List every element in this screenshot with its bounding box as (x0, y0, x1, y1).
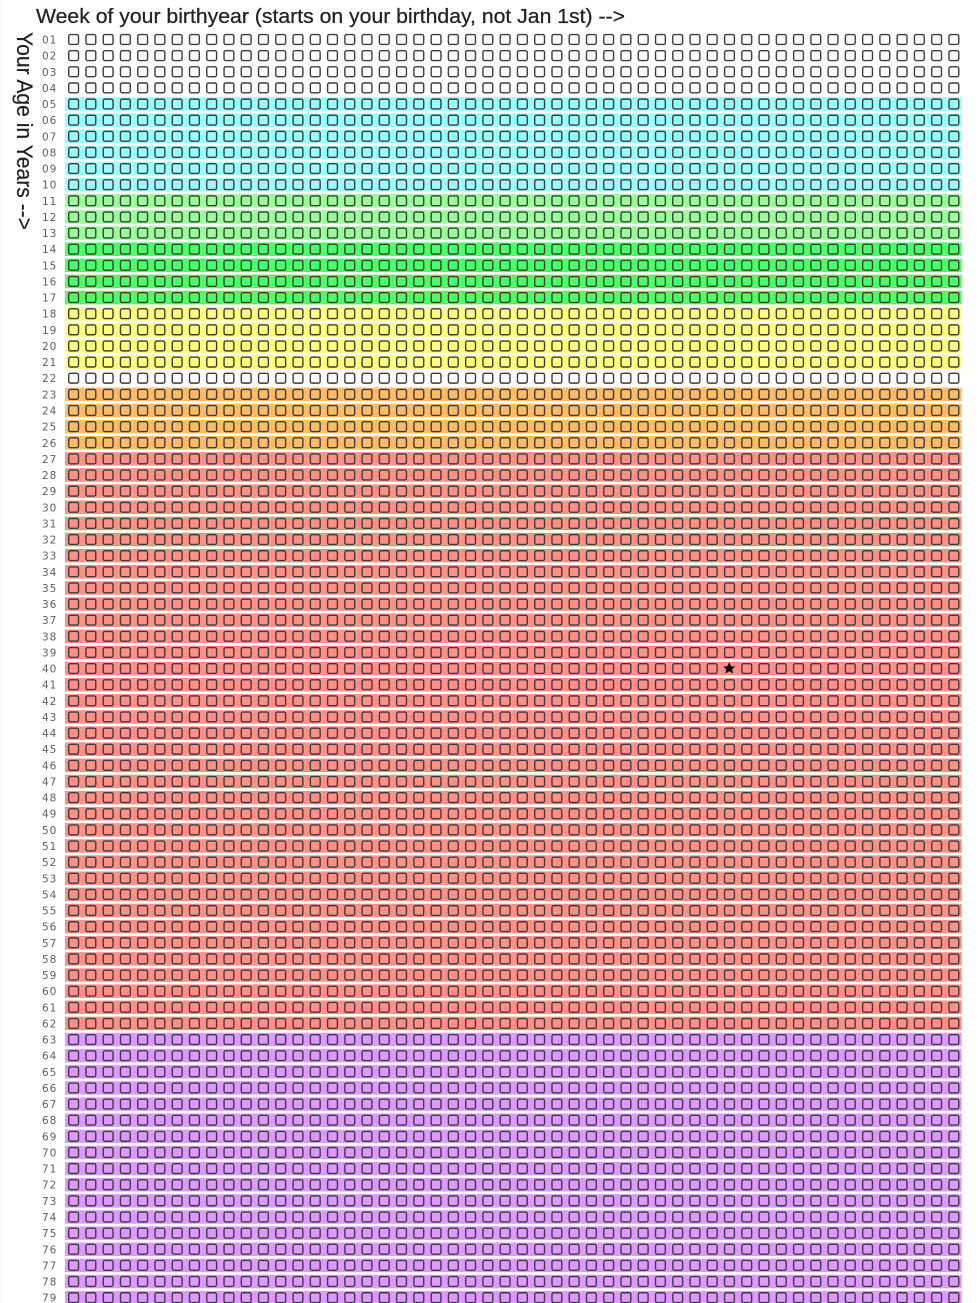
band: ages 14-17, green: 16 (42, 276, 57, 288)
band: ages 27-62, red: 53 (42, 873, 57, 885)
band: ages 18-21, yellow: 18 (42, 309, 57, 321)
band: ages 27-62, red: 34 (42, 567, 57, 579)
band: ages 63-79, purple: 71 (42, 1164, 57, 1176)
band: ages 63-79, purple: 65 (42, 1067, 57, 1079)
band: ages 27-62, red: 41 (42, 680, 57, 692)
band: ages 63-79, purple: 67 (42, 1099, 57, 1111)
band: ages 27-62, red: 46 (42, 760, 57, 772)
band: ages 27-62, red: 45 (42, 744, 57, 756)
band: ages 18-21, yellow: 20 (42, 341, 57, 353)
band: ages 14-17, green (42, 242, 962, 305)
band: age 22, white: 22 (42, 373, 57, 385)
band: ages 63-79, purple: 72 (42, 1180, 57, 1192)
band: ages 63-79, purple: 63 (42, 1035, 57, 1047)
title: horizontal axis heading: Week of your birthyear (starts on your birthday, not Jan 1st) --> (36, 6, 625, 28)
band: ages 23-26, orange (42, 388, 962, 450)
band: ages 5-10, cyan (42, 97, 962, 192)
band: ages 1-4, white: 02 (42, 51, 57, 63)
band: ages 27-62, red: 62 (42, 1018, 57, 1030)
band: ages 27-62, red (42, 452, 962, 1030)
band: ages 63-79, purple: 78 (42, 1277, 57, 1289)
band: ages 27-62, red: 43 (42, 712, 57, 724)
band: ages 27-62, red: 55 (42, 906, 57, 918)
band: ages 5-10, cyan: 05 (42, 99, 57, 111)
band: ages 11-13, light green: 13 (42, 228, 57, 240)
band: ages 63-79, purple: 69 (42, 1131, 57, 1143)
band: ages 27-62, red: 38 (42, 631, 57, 643)
band: ages 27-62, red: 48 (42, 793, 57, 805)
band: ages 27-62, red: 29 (42, 486, 57, 498)
band: ages 18-21, yellow (42, 307, 962, 369)
band: ages 63-79, purple: 64 (42, 1051, 57, 1063)
band: ages 14-17, green: 15 (42, 260, 57, 272)
band: ages 27-62, red: 33 (42, 551, 57, 563)
band: ages 27-62, red: 44 (42, 728, 57, 740)
band: ages 23-26, orange: 26 (42, 438, 57, 450)
band: ages 27-62, red: 58 (42, 954, 57, 966)
band: ages 23-26, orange: 24 (42, 405, 57, 417)
band: ages 63-79, purple: 70 (42, 1147, 57, 1159)
band: ages 27-62, red: 60 (42, 986, 57, 998)
band: ages 18-21, yellow: 21 (42, 357, 57, 369)
band: ages 23-26, orange: 23 (42, 389, 57, 401)
band: ages 27-62, red: 56 (42, 922, 57, 934)
icon: star marking current week at age 40 (723, 662, 736, 675)
band: ages 14-17, green: 14 (42, 244, 57, 256)
band: ages 63-79, purple: 77 (42, 1260, 57, 1272)
band: ages 11-13, light green: 11 (42, 196, 57, 208)
band: ages 11-13, light green (42, 194, 962, 240)
band: age 22, white (42, 371, 962, 385)
band: ages 1-4, white: 04 (42, 83, 57, 95)
band: ages 5-10, cyan: 10 (42, 180, 57, 192)
band: ages 63-79, purple: 74 (42, 1212, 57, 1224)
band: ages 27-62, red: 27 (42, 454, 57, 466)
band: ages 27-62, red: 47 (42, 776, 57, 788)
band: ages 63-79, purple (42, 1033, 962, 1303)
band: ages 27-62, red: 37 (42, 615, 57, 627)
band: ages 27-62, red: 30 (42, 502, 57, 514)
band: ages 1-4, white (42, 33, 962, 95)
band: ages 5-10, cyan: 08 (42, 147, 57, 159)
band: ages 27-62, red: 35 (42, 583, 57, 595)
band: ages 5-10, cyan: 07 (42, 131, 57, 143)
band: ages 27-62, red: 57 (42, 938, 57, 950)
band: ages 63-79, purple: 75 (42, 1228, 57, 1240)
band: ages 18-21, yellow: 19 (42, 325, 57, 337)
band: ages 14-17, green: 17 (42, 293, 57, 305)
band: ages 63-79, purple: 76 (42, 1244, 57, 1256)
band: ages 1-4, white: 03 (42, 67, 57, 79)
band: ages 63-79, purple: 68 (42, 1115, 57, 1127)
band: ages 5-10, cyan: 06 (42, 115, 57, 127)
band: ages 27-62, red: 52 (42, 857, 57, 869)
band: ages 27-62, red: 50 (42, 825, 57, 837)
band: ages 27-62, red: 28 (42, 470, 57, 482)
band: ages 63-79, purple: 73 (42, 1196, 57, 1208)
band: ages 11-13, light green: 12 (42, 212, 57, 224)
band: ages 27-62, red: 61 (42, 1002, 57, 1014)
band: ages 27-62, red: 42 (42, 696, 57, 708)
band: ages 27-62, red: 36 (42, 599, 57, 611)
vertical axis heading: Your Age in Years --> (12, 32, 37, 230)
band: ages 23-26, orange: 25 (42, 422, 57, 434)
band: ages 27-62, red: 40 (42, 664, 57, 676)
band: ages 63-79, purple: 66 (42, 1083, 57, 1095)
band: ages 27-62, red: 39 (42, 647, 57, 659)
band: ages 5-10, cyan: 09 (42, 164, 57, 176)
band: ages 27-62, red: 49 (42, 809, 57, 821)
band: ages 27-62, red: 51 (42, 841, 57, 853)
band: ages 1-4, white: 01 (42, 34, 57, 46)
band: ages 27-62, red: 31 (42, 518, 57, 530)
band: ages 27-62, red: 32 (42, 535, 57, 547)
band: ages 27-62, red: 54 (42, 889, 57, 901)
band: ages 27-62, red: 59 (42, 970, 57, 982)
